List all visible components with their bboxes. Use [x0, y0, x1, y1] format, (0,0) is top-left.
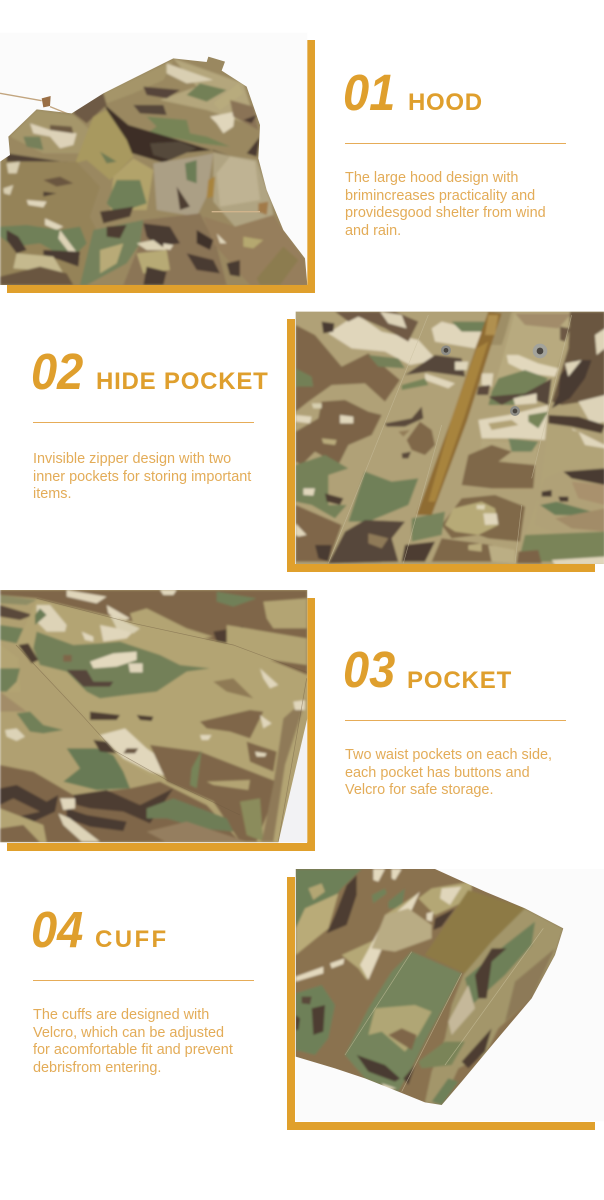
photo frame accent [7, 598, 315, 851]
text block: 02 hide pocket [31, 342, 269, 502]
description: for acomfortable fit and prevent [33, 1042, 233, 1058]
panel: pocket [0, 590, 315, 851]
description: each pocket has buttons and [345, 764, 530, 780]
number 01: 01 [343, 63, 395, 121]
description: items. [33, 486, 72, 502]
heading: pocket: POCKET [407, 667, 512, 694]
number 04: 04 [31, 900, 83, 958]
photo: hood of camouflage jacket [0, 40, 308, 285]
description: inner pockets for storing important [33, 468, 251, 484]
photo: velcro cuff [296, 869, 564, 1105]
photo: waist pocket [0, 590, 308, 842]
photo frame accent [7, 40, 315, 293]
description: debrisfrom entering. [33, 1060, 161, 1076]
divider [33, 980, 254, 981]
panel: cuff [287, 869, 595, 1130]
description: The large hood design with [345, 170, 518, 186]
description [33, 1007, 233, 1076]
description: Velcro for safe storage. [345, 782, 493, 798]
panel: hood [0, 40, 315, 293]
photo frame accent [287, 319, 595, 572]
divider [345, 720, 566, 721]
number 03: 03 [343, 640, 395, 698]
text block: 01 hood [343, 63, 566, 238]
text block: 03 pocket [343, 640, 566, 798]
description [345, 170, 546, 238]
photo frame accent [287, 877, 595, 1130]
description [33, 451, 252, 502]
description: providesgood shelter from wind [345, 205, 546, 221]
description: The cuffs are designed with [33, 1007, 209, 1023]
heading: hide pocket: HIDE POCKET [96, 368, 269, 395]
heading: hood: HOOD [408, 89, 483, 116]
divider [33, 422, 254, 423]
description: and rain. [345, 222, 401, 238]
description: brimincreases practicality and [345, 188, 535, 204]
description: Invisible zipper design with two [33, 451, 231, 467]
number 02: 02 [31, 342, 83, 400]
heading: cuff: CUFF [95, 926, 169, 953]
description [345, 747, 552, 798]
description: Velcro, which can be adjusted [33, 1024, 224, 1040]
panel: hide pocket [287, 312, 604, 572]
photo: zipper pocket [296, 312, 604, 564]
description: Two waist pockets on each side, [345, 747, 552, 763]
text block: 04 cuff [31, 900, 254, 1076]
divider [345, 143, 566, 144]
